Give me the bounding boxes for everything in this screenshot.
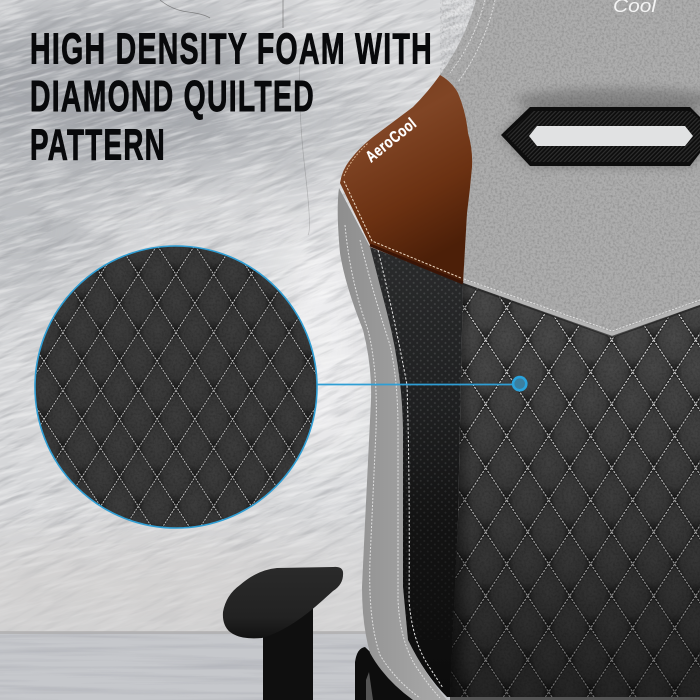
brown panel logo: AeroCool [363, 115, 420, 166]
floor [0, 631, 700, 700]
grey lip and seam above quilting [463, 279, 700, 337]
armrest post [263, 606, 313, 700]
title line 1: HIGH DENSITY FOAM WITH [30, 26, 433, 74]
chair backrest [338, 0, 700, 700]
magnified quilting circle [35, 246, 317, 528]
armrest pad [223, 567, 343, 638]
title line 3: PATTERN [30, 121, 166, 169]
slot opening [529, 126, 693, 146]
bottom edge [450, 697, 700, 700]
armrest [223, 567, 343, 700]
title [30, 26, 433, 169]
side bolster grey strip [338, 188, 447, 700]
main grey upholstery [440, 0, 700, 340]
circle border [35, 246, 317, 528]
black perforated panel [370, 247, 463, 697]
headrest strap slot [501, 107, 700, 166]
title line 2: DIAMOND QUILTED [30, 73, 315, 121]
diamond quilted panel [445, 280, 700, 700]
callout leader line [316, 384, 513, 386]
callout anchor dot [513, 377, 526, 390]
brown leather shoulder [340, 75, 472, 283]
caster wheel [355, 647, 420, 700]
